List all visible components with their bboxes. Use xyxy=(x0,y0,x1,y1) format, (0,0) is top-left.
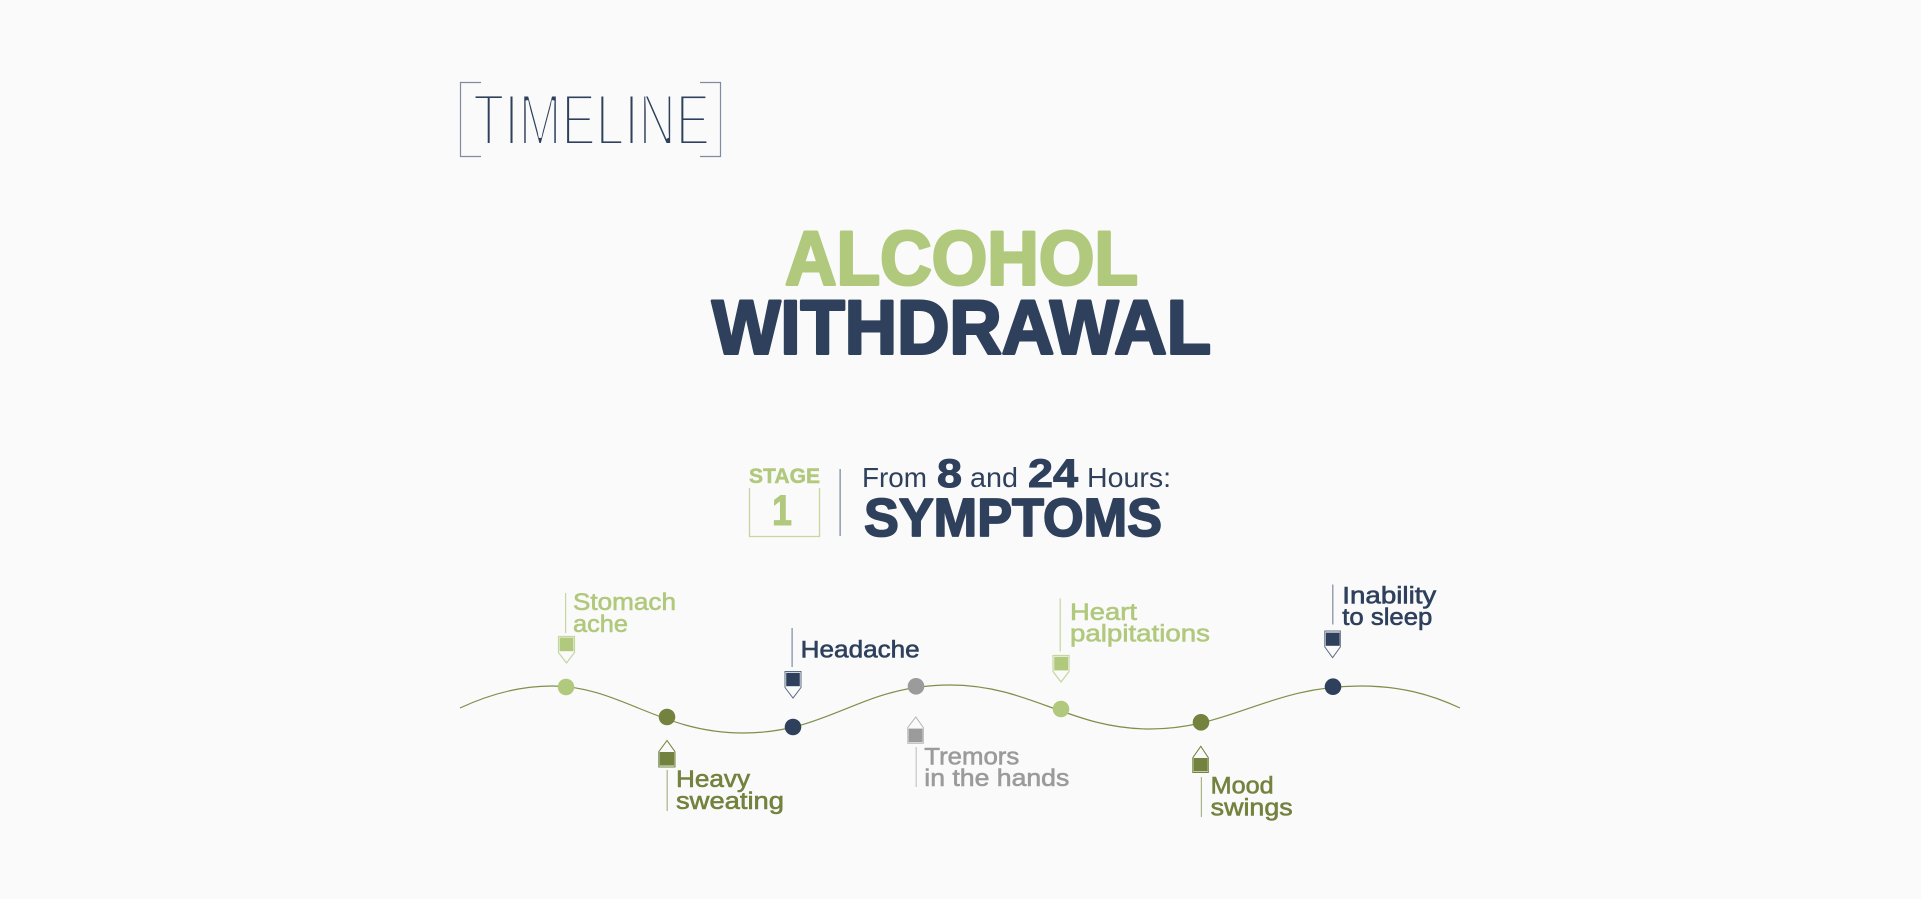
dot xyxy=(1325,678,1341,695)
label: in the hands xyxy=(924,765,1069,792)
and: and xyxy=(970,462,1018,493)
leader line xyxy=(667,770,668,811)
label: Heart xyxy=(1070,599,1137,626)
milestone: tremors in the hands xyxy=(908,678,1069,792)
label: palpitations xyxy=(1070,621,1210,648)
right bracket xyxy=(700,82,720,156)
pin xyxy=(1053,656,1069,682)
timeline word: TIMELINE xyxy=(473,80,710,161)
leader line xyxy=(1332,584,1333,624)
milestone: headache xyxy=(785,628,920,735)
stage box xyxy=(750,488,820,536)
label: Tremors xyxy=(924,743,1019,770)
pin xyxy=(908,717,923,743)
milestone: inability to sleep xyxy=(1325,582,1436,695)
pin fill xyxy=(1054,657,1068,670)
dot xyxy=(1193,714,1209,731)
dot xyxy=(785,719,801,735)
stage divider xyxy=(840,469,841,536)
number 8: 8 xyxy=(937,452,962,496)
milestone: heart palpitations xyxy=(1053,598,1210,717)
leader line xyxy=(1060,598,1061,652)
pin fill xyxy=(560,638,573,651)
pin fill xyxy=(786,673,800,686)
milestone: stomach ache xyxy=(558,589,676,695)
stage badge xyxy=(749,464,820,536)
title line: alcohol: ALCOHOL xyxy=(785,216,1138,302)
dot xyxy=(1053,701,1069,717)
main title xyxy=(712,216,1211,370)
milestone: mood swings xyxy=(1193,714,1293,822)
wave timeline line xyxy=(460,685,1460,733)
label: ache xyxy=(573,611,628,638)
from: From xyxy=(862,462,927,493)
stage number: 1 xyxy=(772,487,792,535)
hours: Hours: xyxy=(1087,462,1171,493)
pin xyxy=(659,740,675,767)
leader line xyxy=(792,628,793,667)
heading: timeline in brackets xyxy=(460,80,720,161)
stage label: STAGE xyxy=(749,464,820,488)
label: Heavy xyxy=(676,766,750,793)
label: sweating xyxy=(676,788,784,815)
pin xyxy=(785,672,801,698)
label: to sleep xyxy=(1342,604,1432,631)
leader line xyxy=(565,593,566,633)
dot xyxy=(908,678,924,695)
stage heading xyxy=(862,452,1171,548)
dot xyxy=(558,679,574,695)
pin fill xyxy=(660,752,674,766)
label: Stomach xyxy=(573,589,676,616)
pin xyxy=(558,636,574,663)
leader line xyxy=(1201,777,1202,817)
label: Mood xyxy=(1211,772,1274,799)
pin xyxy=(1325,631,1340,658)
pin xyxy=(1193,746,1208,772)
milestone: heavy sweating xyxy=(659,709,784,815)
label: swings xyxy=(1211,795,1293,822)
symptoms: SYMPTOMS xyxy=(864,488,1162,548)
number 24: 24 xyxy=(1028,452,1079,496)
pin fill xyxy=(1326,633,1340,646)
label: Headache xyxy=(801,636,920,663)
pin fill xyxy=(1194,758,1208,771)
pin fill xyxy=(909,729,923,742)
leader line xyxy=(916,747,917,787)
dot xyxy=(659,709,675,725)
left bracket xyxy=(460,82,481,156)
label: Inability xyxy=(1342,582,1436,609)
title line: withdrawal: WITHDRAWAL xyxy=(712,286,1211,370)
